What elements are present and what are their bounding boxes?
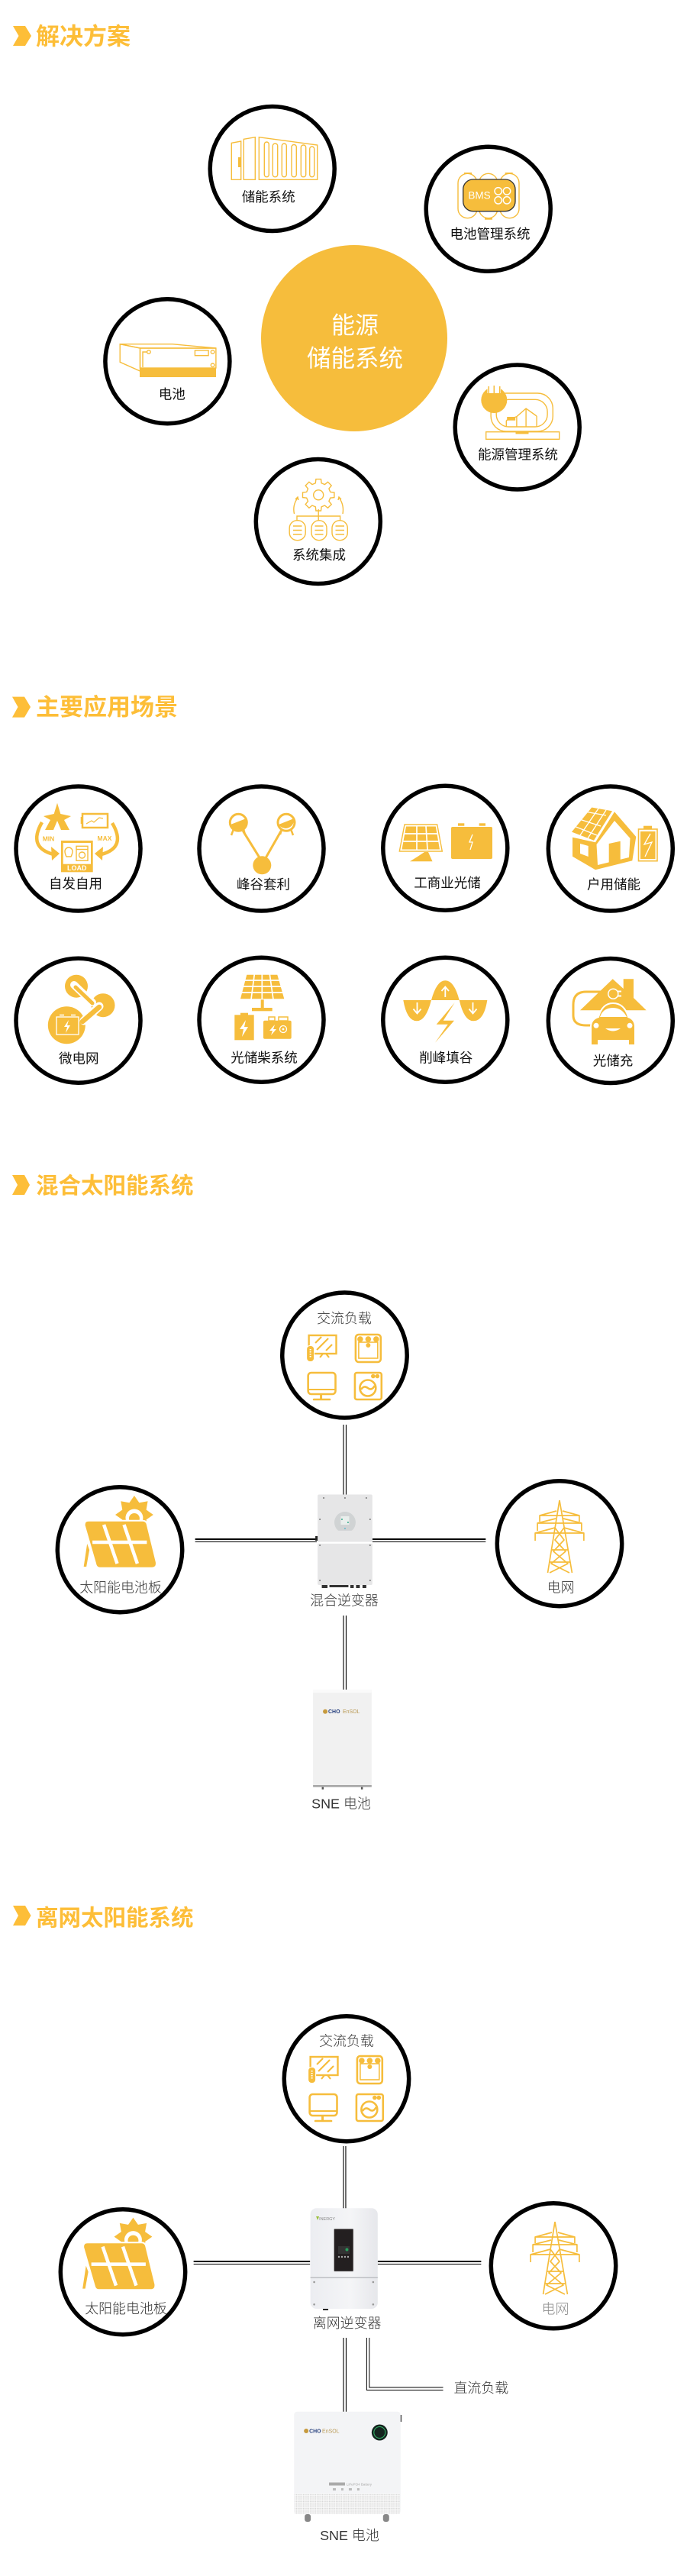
panel: commercial and industrial PV storage: 工商业光储 xyxy=(414,875,481,890)
panel: system integration: 系统集成 xyxy=(292,547,346,563)
panel: grid off-grid xyxy=(491,2203,616,2329)
icon: pylon xyxy=(535,1500,584,1573)
panel: battery: 电池 xyxy=(159,386,185,402)
panel: grid off-grid: 电网 xyxy=(542,2301,569,2317)
label: off-grid inverter: 离网逆变器 xyxy=(313,2316,381,2331)
icon: appliances xyxy=(308,2056,383,2121)
panel: AC load xyxy=(282,1293,407,1418)
label: SNE battery: SNE 电池 xyxy=(320,2528,379,2543)
panel: storage system: 储能系统 xyxy=(242,189,295,205)
panel: commercial and industrial PV storage xyxy=(383,786,508,910)
panel: energy management system: 能源管理系统 xyxy=(478,447,558,463)
panel: self-consumption: 自发自用 xyxy=(49,876,102,891)
panel: battery management system xyxy=(426,147,550,271)
panel: microgrid xyxy=(16,958,140,1083)
icon: pylon xyxy=(531,2222,579,2294)
panel: storage system xyxy=(210,107,334,231)
panel: peak shaving and valley filling: 削峰填谷 xyxy=(419,1051,473,1066)
panel: microgrid: 微电网 xyxy=(59,1051,99,1066)
panel: grid: 电网 xyxy=(547,1580,575,1596)
icon: solar panel xyxy=(82,2218,155,2290)
icon: self-consumption: MIN xyxy=(43,835,54,843)
panel: solar panel: 太阳能电池板 xyxy=(79,1580,162,1596)
icon: BMS: BMS xyxy=(468,189,491,202)
heading: hybrid solar system: 混合太阳能系统 xyxy=(36,1173,194,1199)
device: SNE battery tower xyxy=(313,1690,372,1790)
heading: main application scenarios: 主要应用场景 xyxy=(36,694,178,721)
label: SNE battery: SNE 电池 xyxy=(311,1796,371,1812)
panel: energy management system xyxy=(455,365,579,489)
diagram: off-grid solar system xyxy=(60,2016,616,2543)
center circle: energy storage system: 储能系统 xyxy=(307,344,403,372)
device: SNE battery cabinet: EnSOL xyxy=(322,2429,340,2435)
panel: solar panel off-grid: 太阳能电池板 xyxy=(85,2301,167,2316)
icon: appliances xyxy=(307,1335,382,1399)
device: off-grid inverter: INERGY xyxy=(319,2217,335,2222)
device: hybrid inverter xyxy=(315,1495,373,1588)
device: SNE battery cabinet xyxy=(294,2412,402,2522)
icon: self-consumption: MAX xyxy=(98,834,112,842)
heading: solutions: 解决方案 xyxy=(36,23,131,50)
icon: solar panel and battery xyxy=(399,823,492,861)
icon: house with solar roof and battery xyxy=(571,807,657,870)
panel: residential storage xyxy=(548,786,672,911)
device: SNE battery cabinet: CHO xyxy=(309,2429,321,2435)
panel: peak shaving and valley filling xyxy=(383,957,508,1082)
device: SNE battery tower: CHO xyxy=(328,1709,340,1715)
icon: gear and modules xyxy=(289,479,347,541)
panel: PV storage diesel system xyxy=(199,957,324,1082)
panel: PV storage charging: 光储充 xyxy=(593,1054,633,1069)
connector lines: hybrid system xyxy=(195,1425,485,1690)
panel: peak-valley arbitrage xyxy=(199,786,324,911)
icon: storage containers xyxy=(231,137,318,179)
center circle: energy storage system xyxy=(261,245,447,431)
icon: self-consumption xyxy=(37,803,118,872)
device: SNE battery cabinet: LiFePO4 Battery xyxy=(347,2482,373,2487)
device: off-grid inverter xyxy=(311,2208,378,2310)
diagram: hybrid solar system xyxy=(57,1293,622,1812)
icon: microgrid links xyxy=(48,975,114,1044)
panel: AC load: 交流负载 xyxy=(317,1311,372,1326)
panel: battery xyxy=(105,299,230,424)
panel: AC load off-grid: 交流负载 xyxy=(319,2033,374,2049)
panel: solar panel xyxy=(57,1487,182,1612)
panel: grid xyxy=(497,1481,622,1606)
label: DC load: 直流负载 xyxy=(453,2381,508,2396)
icon: self-consumption: LOAD xyxy=(67,864,87,872)
icon: waves and bolt xyxy=(403,980,487,1043)
icon: solar, battery, generator xyxy=(234,974,292,1040)
icon: peak valley xyxy=(230,814,295,874)
panel: peak-valley arbitrage: 峰谷套利 xyxy=(237,876,290,892)
panel: residential storage: 户用储能 xyxy=(587,876,640,892)
icon: BMS xyxy=(458,173,519,220)
panel: solar panel off-grid xyxy=(60,2210,185,2335)
icon: rack battery xyxy=(120,344,216,377)
icon: plug and chart xyxy=(481,386,560,439)
panel: system integration xyxy=(256,460,380,583)
panel: PV storage diesel system: 光储柴系统 xyxy=(231,1051,298,1066)
heading: off-grid solar system: 离网太阳能系统 xyxy=(36,1906,194,1931)
connector: DC load line xyxy=(366,2338,443,2390)
icon: solar panel xyxy=(84,1496,156,1568)
panel: self-consumption xyxy=(16,786,140,911)
panel: PV storage charging xyxy=(548,959,672,1083)
center circle: energy storage system: 能源 xyxy=(331,312,379,339)
connector lines: off-grid system xyxy=(194,2146,481,2412)
label: hybrid inverter: 混合逆变器 xyxy=(310,1593,379,1609)
panel: AC load off-grid xyxy=(284,2016,409,2142)
device: SNE battery tower: EnSOL xyxy=(343,1709,360,1715)
icon: house, plug and car xyxy=(573,979,647,1045)
panel: battery management system: 电池管理系统 xyxy=(450,226,530,241)
